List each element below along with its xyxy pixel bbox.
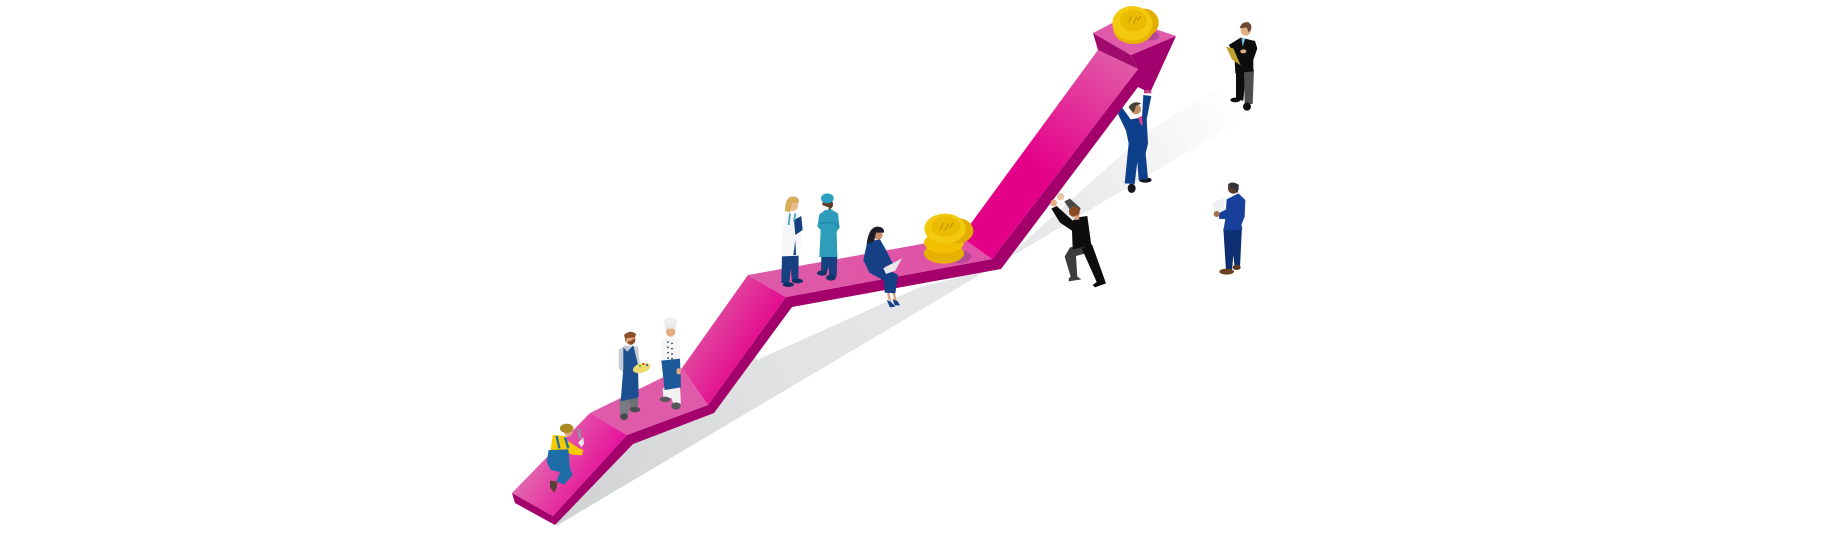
man in blue suit lifting arrow [1118, 90, 1152, 193]
man in blue reading document [1213, 182, 1245, 275]
third slope [961, 50, 1138, 259]
painter with palette [619, 332, 652, 420]
chef in apron [660, 317, 681, 410]
second landing [748, 237, 992, 297]
arrow side faces [512, 69, 1138, 525]
ground shadow [556, 90, 1250, 526]
surgeon in teal scrubs [817, 193, 840, 281]
first slope [512, 413, 627, 516]
first landing [590, 368, 708, 435]
coin stack on arrowhead [1112, 6, 1159, 44]
woman seated with laptop [863, 227, 902, 307]
second slope [682, 275, 786, 405]
doctor with clipboard [781, 196, 803, 287]
man in black pushing arrow [1050, 193, 1106, 287]
arrowhead [1093, 18, 1176, 93]
man with gold clipboard [1226, 22, 1257, 111]
worker in overalls climbing [547, 424, 584, 493]
coin stack on landing [924, 214, 973, 264]
rising pink arrow [512, 18, 1176, 525]
